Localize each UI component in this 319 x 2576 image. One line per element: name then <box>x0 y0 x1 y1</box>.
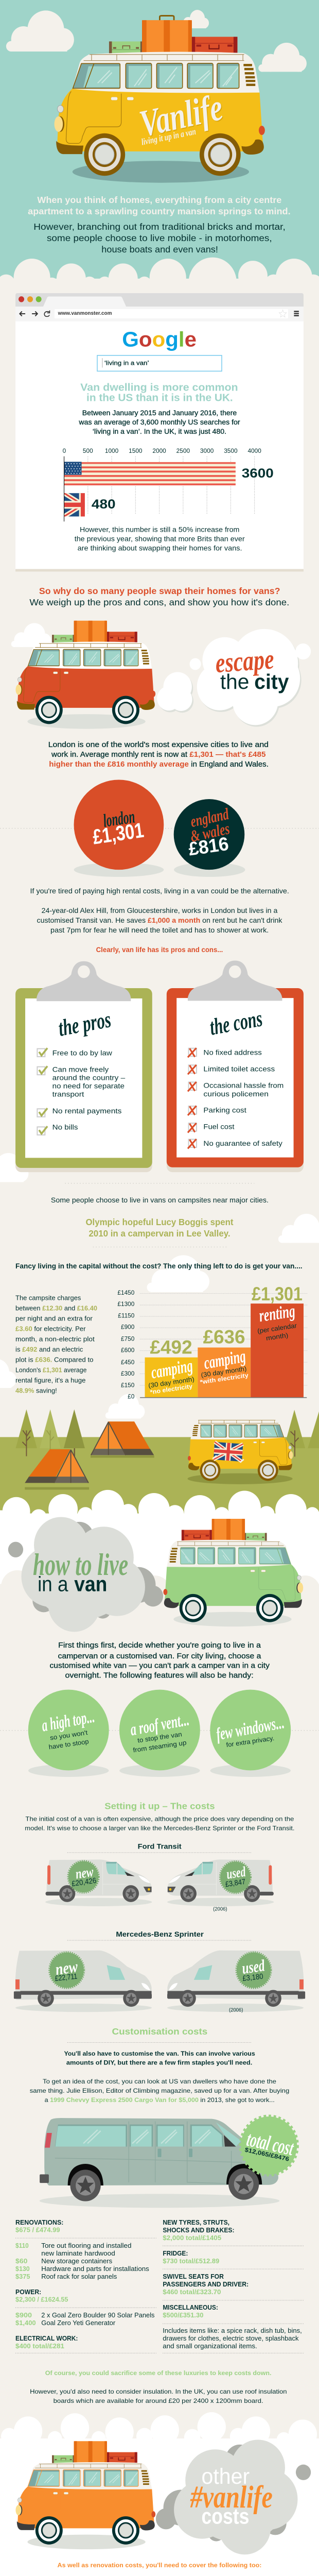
list: power: POWER: <box>15 2289 41 2296</box>
van logo: Vanlife: Vanlife <box>136 86 226 145</box>
section: campsite costs <box>0 1283 319 1650</box>
browser panel: www.vanmonster.com <box>58 311 112 316</box>
text: campsite charges: The campsite charges <box>15 1294 81 1302</box>
text: campsite charges: between £12.30 and £16.40 <box>15 1304 97 1312</box>
list: tyres, fridge, seats, miscellaneous: and small organizational items. <box>163 2343 257 2350</box>
bar chart: rent vs camping: (per calendar <box>257 1322 297 1335</box>
van shadow <box>40 2194 279 2208</box>
callout: Lucy Boggis <box>85 1217 234 1239</box>
cloud: right <box>258 43 307 72</box>
section: other vanlife costs <box>0 2369 319 2576</box>
pros list: No bills <box>52 1123 78 1131</box>
heading: escape the city: city <box>254 670 289 693</box>
pros list: around the country – <box>52 1074 125 1082</box>
list: tyres, fridge, seats, miscellaneous: drawers for clothes, electric stove, splashback <box>163 2335 299 2342</box>
trees <box>15 1410 319 1458</box>
bar chart: rent vs camping: renting <box>258 1301 296 1326</box>
paragraph: London rent: higher than the £816 monthly average in England and Wales. <box>49 760 269 769</box>
list: tyres, fridge, seats, miscellaneous: SWIVEL SEATS FOR <box>163 2273 224 2280</box>
paragraph: customise the van: You'll also have to customise the van. This can involve various <box>64 2050 255 2057</box>
bar chart: rent vs camping: camping <box>202 1347 247 1373</box>
cloud border: white <box>0 1490 319 1587</box>
circle: London rent: london <box>102 806 136 831</box>
text: campsite charges: rental figure, it's a huge <box>15 1376 85 1384</box>
circle: a high top <box>28 1690 109 1777</box>
paragraph: alternative: If you're tired of paying high rental costs, living in a van could be the alternative. <box>30 887 289 895</box>
intro text: apartment to a sprawling country mansion springs to mind. <box>28 206 291 216</box>
circle: London rent <box>74 779 164 877</box>
pros list: no need for separate <box>52 1081 125 1090</box>
bar chart: rent vs camping: £450 <box>121 1359 135 1366</box>
circle: a high top: have to stoop <box>48 1738 89 1751</box>
van shadow <box>73 161 249 183</box>
list: power: $900 <box>15 2312 32 2319</box>
heading: escape the city: escape <box>215 643 275 679</box>
paragraph: choose a van <box>49 1652 270 1680</box>
cloud border: white <box>0 2412 319 2576</box>
cons list: Occasional hassle from <box>203 1081 283 1089</box>
bar chart: rent vs camping: £900 <box>121 1323 135 1331</box>
list: power: $2,300 / £1624.55 <box>15 2296 68 2303</box>
cons list: No guarantee of safety <box>203 1139 282 1147</box>
browser panel <box>15 293 304 571</box>
paragraph: initial cost <box>25 1816 295 1832</box>
bar chart: US vs UK searches: 3600 <box>242 466 274 481</box>
bar chart: US vs UK searches: 1500 <box>129 447 143 454</box>
paragraph: customise the van: amounts of DIY, but there are a few firm staples you'll need. <box>66 2059 252 2066</box>
list: power: $1,400 <box>15 2319 36 2327</box>
smoke cloud <box>8 1517 163 1632</box>
list: tyres, fridge, seats, miscellaneous: $460 total/£323.70 <box>163 2289 221 2296</box>
van: Ford Transit used: (2006) <box>213 1906 227 1912</box>
paragraph: customise the van: a 1999 Chevvy Express 2500 Cargo Van for $5,000 in 2013, she got to work... <box>45 2096 275 2104</box>
paragraph: London rent: work in. Average monthly rent is now at £1,301 — that's £485 <box>51 751 265 759</box>
bar chart: US vs UK searches: 2000 <box>152 447 166 454</box>
list: renovations: Tore out flooring and installed <box>41 2242 132 2249</box>
intro text: some people choose to live mobile - in motorhomes, <box>47 233 272 243</box>
bar chart: rent vs camping: £636 <box>203 1326 245 1348</box>
browser content <box>29 328 289 607</box>
heading: escape the city <box>215 643 289 693</box>
van: Ford Transit new <box>45 1859 152 1906</box>
heading: customisation costs: Customisation costs <box>112 2026 207 2037</box>
background clouds <box>0 1359 145 1418</box>
paragraph: choose a van: customised white van — you can't park a camper van in a city <box>49 1662 270 1670</box>
list: tyres, fridge, seats, miscellaneous: SHOCKS AND BRAKES: <box>163 2227 235 2234</box>
list: renovations: $110 <box>15 2242 29 2249</box>
bar chart: US vs UK searches: 500 <box>83 447 93 454</box>
hero section <box>0 0 319 307</box>
bar chart: rent vs camping: £1300 <box>117 1300 135 1308</box>
cons list <box>188 1048 283 1148</box>
bar chart: rent vs camping: £1150 <box>118 1312 135 1319</box>
heading: why swap <box>29 586 289 607</box>
paragraph: alternative: Clearly, van life has its pros and cons... <box>96 946 223 954</box>
list: tyres, fridge, seats, miscellaneous: MISCELLANEOUS: <box>163 2304 218 2311</box>
list: renovations: RENOVATIONS: <box>15 2219 63 2226</box>
paragraph: insulation <box>30 2388 287 2404</box>
list: tyres, fridge, seats, miscellaneous: $500/£351.30 <box>163 2312 203 2319</box>
campsite ground <box>0 1437 319 1517</box>
van: Ford Transit used: £3,847 <box>225 1878 246 1889</box>
pros list: No rental payments <box>52 1107 121 1115</box>
circle: England and Wales rent <box>174 799 245 877</box>
list: renovations: $130 <box>15 2265 30 2273</box>
van logo: Vanlife: living it up in a van <box>140 126 197 147</box>
list: electrical work: ELECTRICAL WORK: <box>15 2335 78 2342</box>
intro text <box>28 195 291 255</box>
paragraph: 50% increase: are thinking about swapping their homes for vans. <box>78 544 242 552</box>
list: power: 2 x Goal Zero Boulder 90 Solar Panels <box>41 2312 155 2319</box>
bar chart: rent vs camping: month) <box>265 1332 289 1342</box>
list: renovations: $375 <box>15 2273 30 2280</box>
list: tyres, fridge, seats, miscellaneous: $2,000 total/£1405 <box>163 2234 221 2242</box>
heading: why swap: So why do so many people swap their homes for vans? <box>39 586 280 596</box>
bar chart: rent vs camping: £0 <box>128 1393 135 1400</box>
paragraph: searches: ‘living in a van’. In the UK, it was just 480. <box>93 428 226 435</box>
van: Ford Transit new: £20,426 <box>71 1876 97 1888</box>
cons list: Fuel cost <box>203 1122 235 1130</box>
cons list: Limited toilet access <box>203 1064 275 1073</box>
bar chart: rent vs camping: (30 day month) <box>148 1376 195 1389</box>
paragraph: London rent: London is one of the world's most expensive cities to live and <box>48 741 269 749</box>
bar chart: rent vs camping: £150 <box>121 1381 135 1389</box>
cons list: curious policemen <box>203 1090 269 1098</box>
paragraph: 50% increase <box>75 526 245 552</box>
heading: how to live in a van <box>33 1547 128 1596</box>
list: renovations: $60 <box>15 2258 27 2265</box>
circle: a roof vent <box>119 1690 200 1777</box>
circle: a roof vent: a roof vent... <box>129 1710 190 1740</box>
van: Sprinter used: £3,180 <box>242 1973 263 1983</box>
circle: few windows: few windows... <box>215 1713 286 1744</box>
text: campsite charges <box>15 1294 97 1395</box>
circle: few windows: for extra privacy. <box>226 1735 275 1749</box>
heading: how to live in a van: in a <box>38 1572 68 1596</box>
intro text: house boats and even vans! <box>101 244 218 255</box>
heading: escape the city: the <box>220 670 249 693</box>
heading: setting it up: Setting it up – The costs <box>104 1801 215 1811</box>
cloud border: cream <box>0 1570 319 1609</box>
clipboard: the cons: the cons <box>208 1006 264 1040</box>
heading: other vanlife costs: costs <box>201 2504 249 2529</box>
tent: front <box>25 1449 89 1489</box>
Chevy van <box>40 2118 278 2201</box>
list: power: Goal Zero Yeti Generator <box>41 2319 115 2327</box>
heading: Mercedes-Benz Sprinter: Mercedes-Benz Sprinter <box>116 1930 204 1938</box>
Google logo: Google <box>122 328 197 351</box>
bar chart: rent vs camping: £1450 <box>117 1289 135 1296</box>
paragraph: initial cost: The initial cost of a van is often expensive, although the price does vary depending on the <box>25 1816 294 1823</box>
paragraph: insulation: boards which are available for around £20 per 2400 x 1200mm board. <box>54 2397 263 2404</box>
list: renovations <box>15 2219 156 2280</box>
van: Sprinter used <box>167 1951 305 2013</box>
intro text: However, branching out from traditional bricks and mortar, <box>33 222 286 232</box>
paragraph: searches: was an average of 3,600 monthly US searches for <box>78 418 240 426</box>
paragraph: choose a van: overnight. The following features will also be handy: <box>65 1671 254 1680</box>
section: customisation costs <box>15 2026 304 2353</box>
paragraph: searches <box>78 409 240 435</box>
heading: how to live in a van: van <box>74 1572 107 1596</box>
paragraph: alternative: customised Transit van. He saves £1,000 a month on rent but he can't drink <box>37 917 282 924</box>
clipboard: the pros: the pros <box>57 1007 113 1041</box>
paragraph: initial cost: model. It's wise to choose a larger van like the Mercedes-Benz Sprinter or the Ford Transit. <box>25 1824 295 1832</box>
bar chart: rent vs camping: camping <box>150 1356 194 1383</box>
bar chart: US vs UK searches: 3000 <box>200 447 214 454</box>
heading: other vanlife costs: #vanlife <box>190 2480 273 2515</box>
section: pros and cons <box>0 960 319 1292</box>
bar chart: rent vs camping: £300 <box>121 1370 135 1377</box>
text: campsite charges: London's £1,301 average <box>15 1366 86 1374</box>
van logo: Vanlife: Vanlife <box>137 87 227 146</box>
bar chart: US vs UK searches: 2500 <box>176 447 190 454</box>
list: electrical work <box>15 2335 156 2353</box>
circle: a roof vent: to stop the van <box>137 1731 183 1744</box>
bar chart: rent vs camping: *with electricity <box>200 1372 249 1386</box>
paragraph: alternative: 24-year-old Alex Hill, from Gloucestershire, works in London but lives in a <box>42 907 278 914</box>
cloud border <box>0 258 319 307</box>
list: renovations: $675 / £474.99 <box>15 2226 60 2234</box>
text: campsite charges: plot is £636. Compared to <box>15 1355 93 1364</box>
text: sacrifice luxuries: Of course, you could sacrifice some of these luxuries to keep costs down. <box>45 2369 271 2377</box>
heading: Ford Transit: Ford Transit <box>138 1842 182 1851</box>
circle: a high top: a high top... <box>40 1707 96 1736</box>
orange van <box>15 2441 155 2545</box>
pros list: Can move freely <box>52 1065 109 1073</box>
list: renovations: Hardware and parts for installations <box>41 2265 149 2273</box>
text: campsite charges: is £492 and an electric <box>15 1345 83 1353</box>
heading: how to live in a van: how to live <box>33 1547 128 1582</box>
paragraph: customise the van: To get an idea of the cost, you can look at US van dwellers who have done the <box>43 2078 276 2085</box>
list: renovations: Roof rack for solar panels <box>41 2273 117 2280</box>
yellow van with UK flag <box>188 1419 293 1481</box>
cloud: top left <box>6 10 74 52</box>
thought bubble <box>157 629 311 727</box>
bar chart: US vs UK searches: 4000 <box>247 447 261 454</box>
van: Ford Transit used: used <box>225 1863 246 1882</box>
text: campsite charges: month, a non-electric plot <box>15 1335 95 1343</box>
pros list: Free to do by law <box>52 1048 113 1057</box>
paragraph: customise the van: same thing. Julie Ellison, Editor of Climbing magazine, saved up for a van. After buying <box>30 2087 289 2094</box>
bar chart: rent vs camping: £492 <box>150 1336 192 1358</box>
text: campsite charges: 48.9% saving! <box>15 1386 57 1395</box>
tent: back <box>91 1421 154 1458</box>
van shadow <box>173 1612 292 1626</box>
pros list: transport <box>52 1090 84 1098</box>
green van <box>163 1519 303 1622</box>
paragraph: alternative <box>30 887 289 954</box>
badge: total cost <box>241 2116 297 2175</box>
list: electrical work: $400 total/£281 <box>15 2343 64 2350</box>
callout: Lucy Boggis: 2010 in a campervan in Lee Valley. <box>88 1229 231 1239</box>
cons list: Parking cost <box>203 1106 246 1114</box>
circle: few windows <box>210 1690 291 1777</box>
heading: fancy living in the capital: Fancy living in the capital without the cost? The only thing left to do is get your van.... <box>15 1262 303 1270</box>
heading: van dwelling: in the US than it is in the UK. <box>86 392 233 403</box>
bar chart: US vs UK searches <box>63 447 274 521</box>
van: Sprinter new: new <box>54 1957 79 1978</box>
paragraph: 50% increase: However, this number is still a 50% increase from <box>80 526 239 534</box>
paragraph: customise the van <box>30 2050 289 2104</box>
van shadow <box>27 714 146 729</box>
search box: ‘living in a van’ <box>104 359 149 367</box>
intro text: When you think of homes, everything from a city centre <box>37 195 281 205</box>
clipboard: the cons <box>167 960 304 1172</box>
circle: a roof vent: from steaming up <box>133 1739 187 1754</box>
text: also cover: As well as renovation costs, you'll need to cover the following too: <box>58 2562 261 2569</box>
van: Sprinter used: (2006) <box>229 2007 243 2013</box>
bar chart: rent vs camping: £600 <box>121 1346 135 1354</box>
heading: van dwelling: Van dwelling is more common <box>80 382 238 393</box>
van: Sprinter new: £22,711 <box>55 1972 78 1983</box>
paragraph: choose a van: campervan or a customised van. For city living, choose a <box>58 1652 261 1660</box>
van: Sprinter used: used <box>241 1956 267 1977</box>
bar chart: rent vs camping: £1,301 <box>252 1283 303 1304</box>
van shadow <box>27 2535 146 2549</box>
paragraph: alternative: past 7pm for fear he will need the toilet and has to shower at work. <box>50 926 269 934</box>
text: campsite charges: per night and an extra for <box>15 1314 93 1323</box>
paragraph: London rent <box>48 741 269 769</box>
text: campsites: Some people choose to live in vans on campsites near major cities. <box>51 1196 269 1204</box>
heading: why swap: We weigh up the pros and cons, and show you how it's done. <box>29 598 289 607</box>
list: tyres, fridge, seats, miscellaneous: PASSENGERS AND DRIVER: <box>163 2281 249 2288</box>
section: escape the city <box>0 621 319 954</box>
circle: England and Wales rent: & wales <box>189 819 231 845</box>
pros list <box>37 1048 125 1135</box>
list: renovations: New storage containers <box>41 2258 112 2265</box>
bar chart: rent vs camping <box>117 1283 308 1400</box>
clipboard: the pros <box>15 961 152 1172</box>
bar chart: US vs UK searches: 3500 <box>224 447 238 454</box>
heading: other vanlife costs <box>190 2464 273 2529</box>
cons list: No fixed address <box>203 1048 262 1057</box>
search box <box>97 355 222 371</box>
list: power <box>15 2289 156 2327</box>
bar chart: US vs UK searches: 0 <box>63 447 66 454</box>
yellow van with luggage <box>55 16 265 176</box>
list: renovations: new laminate hardwood <box>41 2250 115 2257</box>
badge: total cost: $12,065/£8476 <box>244 2146 290 2163</box>
circle: England and Wales rent: £816 <box>187 833 230 860</box>
list: tyres, fridge, seats, miscellaneous <box>163 2219 304 2353</box>
van: Sprinter new <box>14 1951 152 2012</box>
heading: van dwelling <box>80 382 238 403</box>
text: campsite charges: £3.60 for electricity. Per <box>15 1325 86 1333</box>
smoke cloud <box>156 2440 311 2554</box>
bar chart: rent vs camping: £750 <box>121 1335 135 1342</box>
paragraph: searches: Between January 2015 and January 2016, there <box>82 409 237 417</box>
bar chart: US vs UK searches: 480 <box>92 497 116 512</box>
list: tyres, fridge, seats, miscellaneous: NEW TYRES, STRUTS, <box>163 2219 229 2226</box>
list: tyres, fridge, seats, miscellaneous: FRIDGE: <box>163 2250 188 2257</box>
bar chart: US vs UK searches: 1000 <box>105 447 119 454</box>
heading: other vanlife costs: other <box>201 2464 250 2488</box>
cloud: behind suitcases <box>181 10 209 28</box>
paragraph: insulation: However, you'd also need to consider insulation. In the UK, you can use roof insulation <box>30 2388 287 2395</box>
small cloud behind van <box>11 623 51 647</box>
callout: Lucy Boggis: Olympic hopeful Lucy Boggis spent <box>85 1217 234 1227</box>
van shadow on grass <box>188 1473 293 1484</box>
circle: England and Wales rent: england <box>189 804 231 831</box>
paragraph: first things first: First things first, decide whether you're going to live in a <box>58 1641 261 1650</box>
paragraph: 50% increase: the previous year, showing that more Brits than ever <box>75 535 245 543</box>
circle: London rent: £1,301 <box>91 818 145 849</box>
bar chart: rent vs camping: *no electricity <box>150 1383 193 1396</box>
list: tyres, fridge, seats, miscellaneous: Includes items like: a spice rack, dish tub, bins, <box>163 2327 302 2334</box>
background clouds <box>0 1153 319 1292</box>
van: Ford Transit used <box>167 1859 274 1912</box>
van: Ford Transit new: new <box>75 1863 95 1882</box>
bar chart: rent vs camping: (30 day month) <box>201 1365 247 1379</box>
section: features and van costs <box>0 1652 319 2013</box>
list: tyres, fridge, seats, miscellaneous: $730 total/£512.89 <box>163 2258 219 2265</box>
circle: a high top: so you won't <box>49 1729 88 1741</box>
red van <box>15 621 155 724</box>
